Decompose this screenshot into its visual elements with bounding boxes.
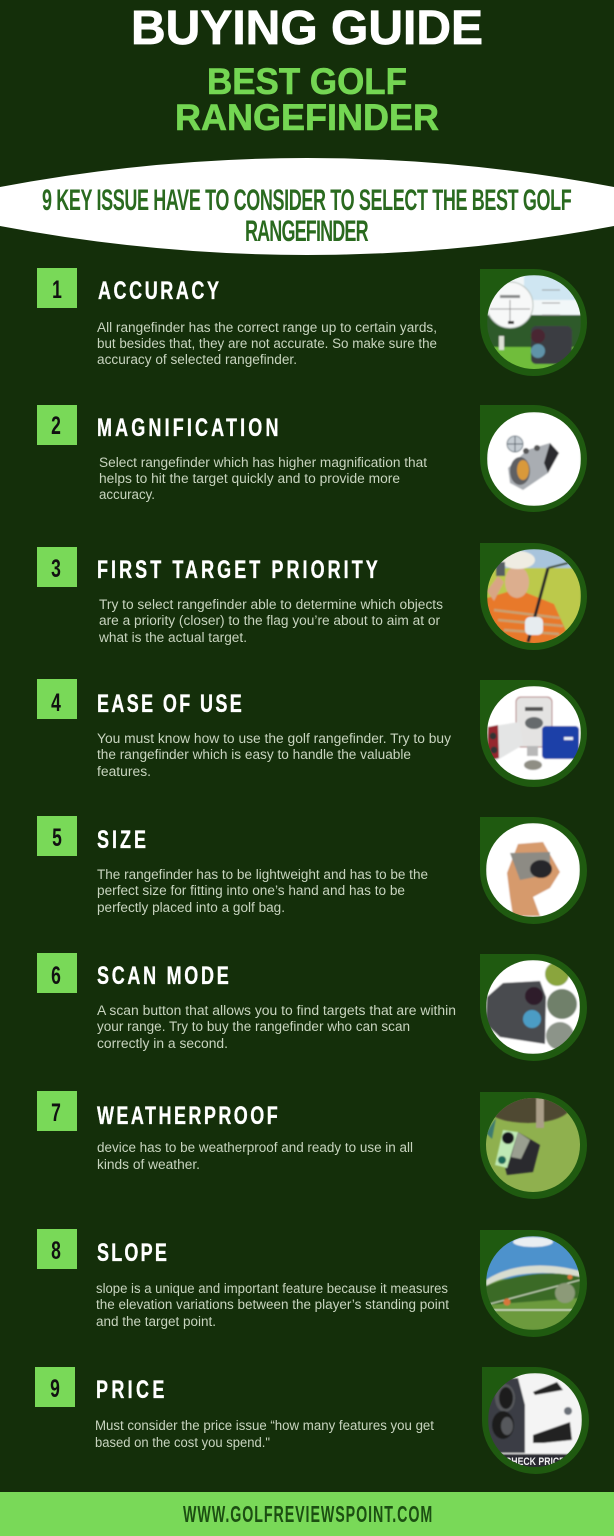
number badge 9 [35,1367,75,1407]
text: first target priority description [98,597,443,645]
number badge 7 [37,1091,77,1131]
text: slope description: and the target point. [96,1314,216,1329]
heading: accuracy: ACCURACY [98,276,219,305]
text: accuracy description: All rangefinder has the correct range up to certain yards, [97,320,437,335]
photo: rangefinder display on course [480,269,587,376]
text: price description: Must consider the price issue “how many features you get [95,1418,434,1433]
item 4: ease of use [37,679,587,787]
number badge 1: 1 [52,275,62,304]
item 9: price [35,1367,589,1474]
photo: golfer in orange shirt [480,543,587,650]
number badge 5 [37,816,77,856]
number badge 2: 2 [51,411,61,440]
subtitle: best golf rangefinder: BEST GOLF [207,61,407,102]
number badge 8 [37,1229,77,1269]
photo: sloped golf course [480,1230,587,1337]
number badge 3 [37,547,77,587]
heading: ease of use: EASE OF USE [97,689,242,718]
number badge 4: 4 [51,688,61,717]
photo: white rangefinder with check price: CHECK PRICE [505,1456,565,1468]
item 3: first target priority [37,543,587,650]
text: first target priority description: are a priority (closer) to the flag you’re about to aim at or [99,613,441,628]
text: magnification description: Select rangefinder which has higher magnification that [99,455,427,470]
text: price description [95,1418,434,1450]
number badge 8: 8 [51,1236,61,1265]
number badge 3: 3 [51,554,61,583]
text: scan mode description: correctly in a second. [97,1036,228,1051]
text: weatherproof description [97,1140,413,1172]
number badge 5: 5 [52,823,62,852]
text: weatherproof description: device has to be weatherproof and ready to use in all [97,1140,413,1155]
text: size description [97,867,428,915]
text: price description: based on the cost you spend." [95,1435,270,1450]
footer band [0,1492,614,1536]
text: ease of use description [97,731,451,779]
text: ease of use description: You must know how to use the golf rangefinder. Try to buy [97,731,451,746]
footer url: WWW.GOLFREVIEWSPOINT.COM [183,1503,432,1528]
number badge 9: 9 [50,1374,60,1403]
text: accuracy description [97,320,437,367]
text: first target priority description: what is the actual target. [98,630,247,645]
photo: green rangefinder on grass [480,1091,587,1199]
photo: hand holding rangefinder [480,817,587,924]
photo: silver rangefinder [480,405,587,512]
item 1: accuracy [37,268,587,376]
number badge 7: 7 [51,1098,61,1127]
photo: dark rangefinder with course views [480,954,587,1061]
text: first target priority description: Try to select rangefinder able to determine which objects [99,597,443,612]
text: magnification description: helps to hit the target quickly and to provide more [99,471,400,486]
title: buying guide: BUYING GUIDE [131,2,483,55]
number badge 1 [37,268,77,308]
item 8: slope [37,1229,587,1337]
number badge 6: 6 [51,961,61,990]
text: size description: The rangefinder has to be lightweight and has to be the [97,867,428,882]
text: scan mode description [97,1003,456,1051]
text: ease of use description: features. [97,764,151,779]
number badge 2 [37,405,77,445]
text: size description: perfect size for fitting into one’s hand and has to be [97,883,405,898]
banner: white lens with key issue text: RANGEFINDER [245,216,369,248]
heading: scan mode: SCAN MODE [97,961,229,990]
text: weatherproof description: kinds of weather. [97,1157,200,1172]
text: scan mode description: your range. Try to buy the rangefinder who can scan [97,1019,410,1034]
photo: rangefinder kit with blue case [480,680,587,787]
number badge 6 [37,953,77,993]
text: magnification description [99,455,427,502]
text: slope description: the elevation variations between the player’s standing point [96,1297,449,1312]
text: slope description [96,1281,449,1329]
item 6: scan mode [37,953,587,1061]
heading: size: SIZE [97,825,146,854]
heading: price: PRICE [96,1375,164,1404]
photo: white rangefinder with check price [482,1367,589,1474]
subtitle: best golf rangefinder: RANGEFINDER [175,97,439,138]
heading: slope: SLOPE [97,1238,167,1267]
heading: magnification: MAGNIFICATION [97,413,278,442]
text: magnification description: accuracy. [99,487,155,502]
banner: white lens with key issue text [0,158,614,255]
text: ease of use description: the rangefinder which is easy to handle the valuable [97,747,411,762]
item 5: size [37,816,587,924]
text: accuracy description: but besides that, they are not accurate. So make sure the [97,336,437,351]
item 7: weatherproof [37,1091,587,1199]
text: scan mode description: A scan button that allows you to find targets that are within [97,1003,456,1018]
text: accuracy description: accuracy of selected rangefinder. [97,352,297,367]
heading: weatherproof: WEATHERPROOF [97,1101,278,1130]
item 2: magnification [37,405,587,512]
subtitle: best golf rangefinder [175,61,439,138]
number badge 4 [37,679,77,719]
banner: white lens with key issue text: 9 KEY ISSUE HAVE TO CONSIDER TO SELECT THE BEST GOLF [42,185,572,217]
heading: first target priority: FIRST TARGET PRIORITY [97,555,378,584]
text: slope description: slope is a unique and important feature because it measures [96,1281,448,1296]
text: size description: perfectly placed into a golf bag. [97,900,285,915]
